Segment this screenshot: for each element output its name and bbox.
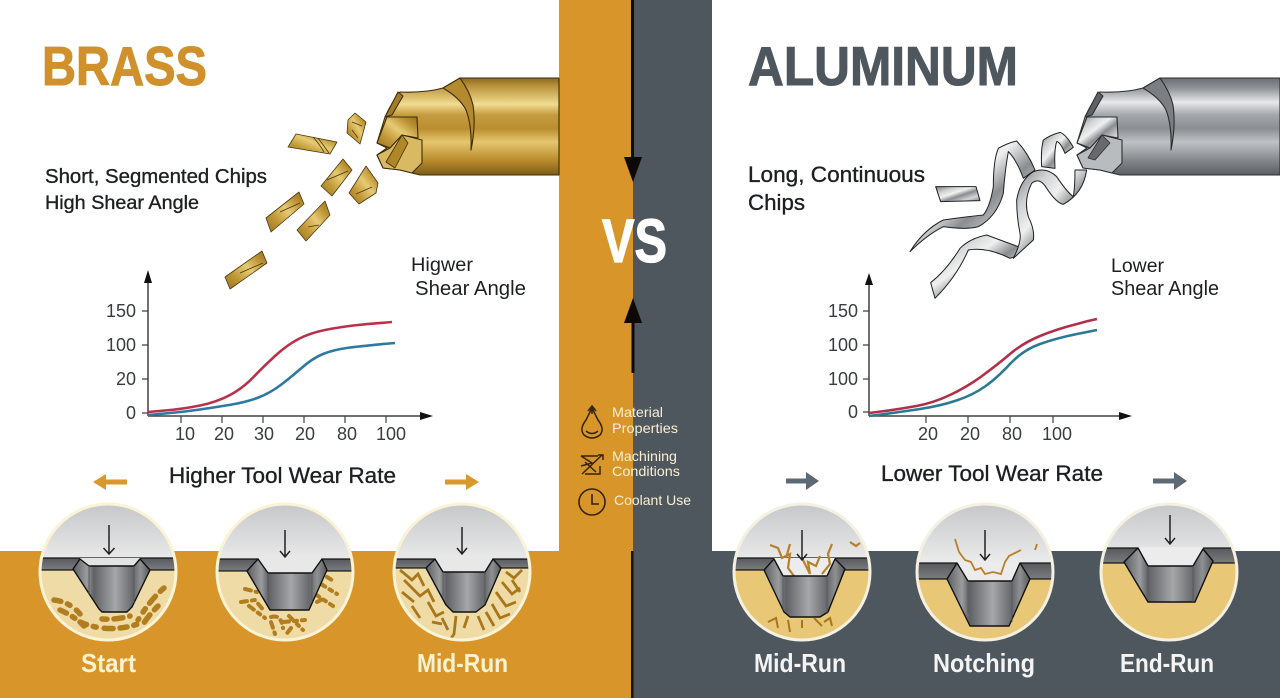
chart: brass shear angle curves: 100	[106, 335, 136, 355]
brass chip description	[45, 165, 267, 214]
icon: material properties	[582, 406, 602, 438]
chart: brass shear angle curves: 30	[254, 424, 274, 444]
icon: coolant clock	[579, 489, 605, 515]
label: notching: Notching	[933, 648, 1035, 678]
wear circle: brass middle	[217, 504, 353, 640]
aluminum shear angle note	[1111, 255, 1219, 300]
wear circle: brass mid-run	[394, 504, 530, 640]
wear circle: brass start	[40, 504, 176, 640]
chart: aluminum shear angle curves: 100	[1042, 424, 1072, 444]
icon: aluminum continuous ribbon chips	[910, 132, 1087, 298]
brass shear angle note	[411, 254, 526, 300]
label: start: Start	[81, 648, 136, 678]
heading: lower tool wear rate: Lower Tool Wear Rate	[881, 461, 1103, 486]
icon: aluminum cutting tool	[1077, 78, 1280, 175]
label: end-run: End-Run	[1120, 648, 1214, 678]
aluminum shear angle note: Shear Angle	[1111, 278, 1219, 300]
brass shear angle note: Shear Angle	[415, 278, 526, 300]
title: brass: BRASS	[42, 35, 207, 97]
chart: brass shear angle curves: 0	[126, 403, 136, 423]
aluminum shear angle note: Lower	[1111, 255, 1164, 277]
chart: aluminum shear angle curves	[828, 273, 1132, 444]
center divider with arrows	[624, 0, 642, 698]
chart: aluminum shear angle curves: 80	[1002, 424, 1022, 444]
chart: brass shear angle curves: 20	[295, 424, 315, 444]
text: coolant use: Coolant Use	[614, 492, 691, 508]
text: machining conditions	[612, 448, 680, 479]
arrow: aluminum right-side	[1153, 472, 1187, 490]
chart: aluminum shear angle curves: 100	[828, 369, 858, 389]
arrow: brass right	[445, 474, 479, 490]
heading: higher tool wear rate: Higher Tool Wear Rate	[169, 463, 396, 488]
chart: aluminum shear angle curves: 20	[960, 424, 980, 444]
text: material properties: Properties	[612, 420, 678, 436]
VS label: VS	[602, 207, 667, 275]
label: aluminum mid-run: Mid-Run	[754, 648, 846, 678]
arrow: brass left	[93, 474, 127, 490]
chart: aluminum shear angle curves: 0	[848, 402, 858, 422]
icon: brass segmented chips	[225, 113, 378, 289]
title: aluminum: ALUMINUM	[748, 35, 1018, 97]
chart: brass shear angle curves: 10	[175, 424, 195, 444]
chart: brass shear angle curves	[106, 270, 433, 444]
chart: brass shear angle curves: 100	[376, 424, 406, 444]
arrow: aluminum left-side	[786, 472, 819, 490]
panel: aluminum gray frame	[633, 0, 1280, 698]
wear circle: aluminum notching	[917, 504, 1053, 640]
text: material properties: Material	[612, 404, 663, 420]
brass chip description: High Shear Angle	[45, 192, 199, 214]
chart: aluminum shear angle curves: 150	[828, 301, 858, 321]
chart: brass shear angle curves: 150	[106, 301, 136, 321]
brass shear angle note: Higwer	[411, 254, 474, 276]
text: machining conditions: Conditions	[612, 463, 680, 479]
panel: brass orange frame	[0, 0, 633, 698]
brass chip description: Short, Segmented Chips	[45, 165, 267, 188]
chart: aluminum shear angle curves: 100	[828, 335, 858, 355]
icon: brass cutting tool	[377, 78, 559, 175]
label: brass mid-run: Mid-Run	[417, 648, 508, 678]
aluminum chip description	[748, 162, 925, 215]
chart: brass shear angle curves: 20	[214, 424, 234, 444]
wear circle: aluminum end-run	[1101, 504, 1237, 640]
icon: machining conditions	[581, 455, 603, 474]
aluminum chip description: Long, Continuous	[748, 162, 925, 187]
text: material properties	[612, 404, 678, 436]
text: machining conditions: Machining	[612, 448, 677, 464]
chart: aluminum shear angle curves: 20	[918, 424, 938, 444]
aluminum chip description: Chips	[748, 190, 805, 215]
chart: brass shear angle curves: 80	[337, 424, 357, 444]
wear circle: aluminum mid-run	[734, 504, 870, 640]
chart: brass shear angle curves: 20	[116, 369, 136, 389]
